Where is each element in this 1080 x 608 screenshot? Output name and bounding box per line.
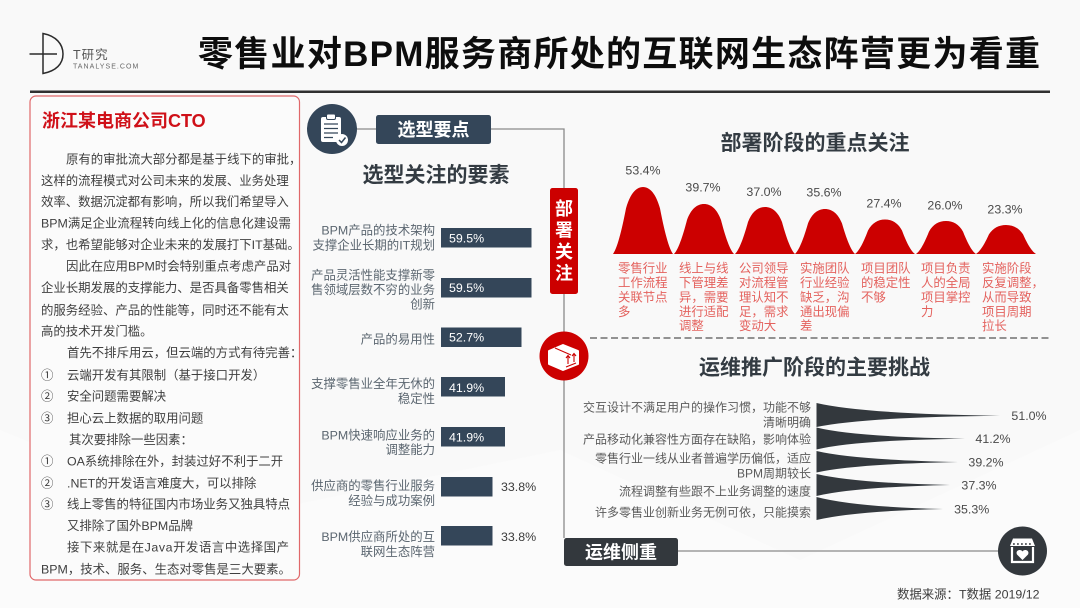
title: 零售业对BPM服务商所处的互联网生态阵营更为看重 xyxy=(198,35,1040,74)
column 7: 23.3% xyxy=(987,202,1023,216)
spike 2: 41.2% xyxy=(975,432,1011,446)
spike 1: 清晰明确 xyxy=(763,416,811,430)
bar 3: 产品的易用性 xyxy=(361,332,435,346)
bar 5: BPM快速响应业务的 xyxy=(321,428,435,442)
column 1: 关联节点 xyxy=(618,290,668,304)
logo: T研究 xyxy=(73,47,109,62)
quote text: 接下来就是在Java开发语言中选择国产 xyxy=(67,540,289,554)
quote text: ① xyxy=(41,452,53,470)
column 7: 实施阶段 xyxy=(982,260,1032,276)
bar 7: BPM供应商所处的互 xyxy=(321,529,435,544)
column 5: 27.4% xyxy=(866,196,902,210)
spike 4 xyxy=(619,474,997,498)
quote text: 因此在应用BPM时会特别重点考虑产品对 xyxy=(66,258,291,274)
bar 2: 59.5% xyxy=(449,281,484,295)
column 4: 实施团队 xyxy=(800,260,850,276)
bar 7: 联网生态阵营 xyxy=(361,545,435,559)
panel heading: 浙江某电商公司CTO xyxy=(42,111,206,131)
quote text: 线上零售的特征国内市场业务又独具特点 xyxy=(67,496,290,512)
column 4: 通出现偏 xyxy=(800,304,850,319)
column 7: 项目周期 xyxy=(982,305,1032,319)
section tag: 选型要点 xyxy=(376,115,491,144)
column 4: 行业经验 xyxy=(800,275,850,290)
quote text: ② xyxy=(41,386,53,404)
quote text: 企业长期发展的支撑能力、是否具备零售相关 xyxy=(41,280,289,295)
bar 1: 59.5% xyxy=(449,232,484,246)
bar 6: 供应商的零售行业服务 xyxy=(311,478,435,493)
spike chart: operations challenges xyxy=(583,400,1047,520)
quote text: 其次要排除一些因素： xyxy=(69,432,193,447)
column 6: 26.0% xyxy=(927,198,963,212)
bar 4: 稳定性 xyxy=(398,391,435,406)
bar 1: 支撑企业长期的IT规划 xyxy=(312,238,435,252)
bar 6 xyxy=(311,477,536,508)
bar 2: 产品灵活性能支撑新零 xyxy=(311,268,436,282)
quote text: ③ xyxy=(41,494,53,512)
column 2: 下管理差 xyxy=(679,275,729,290)
section tag: 部署关注: 部 xyxy=(555,198,573,219)
quote text: 原有的审批流大部分都是基于线下的审批， xyxy=(66,152,301,166)
spike 2 xyxy=(583,428,1011,450)
bar chart: selection factors xyxy=(311,222,536,559)
bar 3 xyxy=(361,328,522,347)
spike 3: 零售行业一线从业者普遍学历偏低，适应 xyxy=(595,450,811,466)
column 3: 37.0% xyxy=(746,185,782,199)
column 5 xyxy=(855,196,915,304)
icon: parcel box xyxy=(540,332,588,380)
column 3: 理认知不 xyxy=(739,290,789,304)
heading: 选型关注的要素: 选型关注的要素 xyxy=(362,164,510,187)
column 6: 力 xyxy=(921,305,933,319)
connector line xyxy=(357,129,1000,551)
column 2: 进行适配 xyxy=(679,305,729,319)
column 1: 零售行业 xyxy=(618,260,668,276)
column 2: 39.7% xyxy=(685,180,721,194)
bar 1: BPM产品的技术架构 xyxy=(321,222,435,238)
column 3 xyxy=(735,185,795,333)
bar 3: 52.7% xyxy=(449,330,484,344)
quote text: ③ xyxy=(41,408,53,426)
bar 2: 售领域层数不穷的业务 xyxy=(311,282,435,297)
column 5: 项目团队 xyxy=(861,260,911,276)
logo xyxy=(30,34,139,74)
section tag: 部署关注: 关 xyxy=(555,242,573,262)
column 3: 公司领导 xyxy=(739,262,789,276)
column 1: 工作流程 xyxy=(618,275,668,290)
quote text: ② xyxy=(41,474,53,492)
data source: 数据来源：T数据 2019/12 xyxy=(897,586,1040,602)
quote text: 这样的流程模式对公司未来的发展、业务处理 xyxy=(41,173,289,188)
section tag: 运维侧重 xyxy=(564,538,678,566)
bar 7 xyxy=(321,526,536,559)
spike 4: 37.3% xyxy=(961,478,997,492)
quote text: 首先不排斥用云，但云端的方式有待完善： xyxy=(67,345,302,360)
bar 4: 41.9% xyxy=(449,381,484,395)
panel: CTO quote xyxy=(30,96,302,580)
quote text: 效率、数据沉淀都有影响，所以我们希望导入 xyxy=(41,194,289,209)
bar 2 xyxy=(311,268,532,312)
column 7: 拉长 xyxy=(982,318,1007,333)
column 3: 足，需求 xyxy=(739,305,789,319)
column 2 xyxy=(674,180,734,333)
section tag: 选型要点: 选型要点 xyxy=(398,120,470,140)
column 7: 反复调整， xyxy=(982,275,1044,290)
heading: 部署阶段的重点关注: 部署阶段的重点关注 xyxy=(720,131,910,155)
quote text: 安全问题需要解决 xyxy=(67,388,166,404)
quote text: ① xyxy=(41,366,53,384)
column 1: 多 xyxy=(618,305,630,319)
column 6: 项目掌控 xyxy=(921,290,971,304)
bar 5 xyxy=(321,427,505,457)
bell chart: deployment focus xyxy=(613,164,1044,333)
bar 5: 调整能力 xyxy=(385,442,435,457)
quote text xyxy=(41,152,302,576)
quote text: 的服务经验、产品的性能等，同时还不能有太 xyxy=(41,302,289,318)
quote text: 求，也希望能够对企业未来的发展打下IT基础。 xyxy=(41,237,300,252)
bar 2: 创新 xyxy=(410,296,435,312)
column 7 xyxy=(976,202,1044,333)
logo: TANALYSE.COM xyxy=(73,64,139,70)
column 6: 项目负责 xyxy=(921,262,971,276)
heading: 运维推广阶段的主要挑战: 运维推广阶段的主要挑战 xyxy=(699,356,930,380)
quote text: BPM，技术、服务、生态对零售是三大要素。 xyxy=(41,562,291,576)
bar 1 xyxy=(312,222,532,252)
column 1: 53.4% xyxy=(625,164,661,178)
bar 4 xyxy=(311,376,505,406)
spike 1 xyxy=(583,400,1047,430)
quote text: 云端开发有其限制（基于接口开发） xyxy=(67,368,265,382)
column 4: 35.6% xyxy=(806,186,842,200)
quote text: 担心云上数据的取用问题 xyxy=(67,410,203,426)
section tag: 部署关注: 署 xyxy=(555,220,573,240)
column 3: 变动大 xyxy=(739,318,776,333)
bar 6: 经验与成功案例 xyxy=(348,493,435,508)
section tag: 部署关注: 注 xyxy=(555,264,573,284)
spike 4: 流程调整有些跟不上业务调整的速度 xyxy=(619,484,811,498)
spike 3: BPM周期较长 xyxy=(737,466,811,480)
column 2: 调整 xyxy=(679,318,704,333)
column 1 xyxy=(613,164,673,319)
quote text: 高的技术开发门槛。 xyxy=(41,324,153,338)
column 6: 人的全局 xyxy=(921,275,971,290)
bar 4: 支撑零售业全年无休的 xyxy=(311,376,435,391)
spike 1: 交互设计不满足用户的操作习惯，功能不够 xyxy=(583,400,811,414)
quote text: BPM满足企业流程转向线上化的信息化建设需 xyxy=(41,216,291,230)
spike 2: 产品移动化兼容性方面存在缺陷，影响体验 xyxy=(583,432,811,446)
spike 5: 许多零售业创新业务无例可依，只能摸索 xyxy=(595,504,811,520)
column 2: 线上与线 xyxy=(679,262,729,276)
bar 7: 33.8% xyxy=(501,530,536,544)
quote text: OA系统排除在外，封装过好不利于二开 xyxy=(67,454,283,468)
spike 3: 39.2% xyxy=(968,456,1004,470)
icon: store xyxy=(998,526,1047,576)
column 7: 从而导致 xyxy=(982,290,1032,304)
bar 6: 33.8% xyxy=(501,480,536,494)
spike 3 xyxy=(595,450,1004,480)
spike 5 xyxy=(595,497,989,520)
column 5: 不够 xyxy=(861,290,886,304)
column 3: 对流程管 xyxy=(739,275,789,290)
section tag: 运维侧重: 运维侧重 xyxy=(585,542,657,562)
bar 5: 41.9% xyxy=(449,430,484,444)
icon: clipboard xyxy=(307,104,357,154)
quote text: 又排除了国外BPM品牌 xyxy=(67,518,193,533)
column 5: 的稳定性 xyxy=(861,275,911,290)
column 6 xyxy=(916,198,976,319)
section tag: 部署关注 xyxy=(550,188,578,294)
column 2: 异，需要 xyxy=(679,290,729,304)
quote text: .NET的开发语言难度大，可以排除 xyxy=(67,476,257,490)
spike 5: 35.3% xyxy=(954,502,989,516)
column 4: 差 xyxy=(800,319,812,333)
spike 1: 51.0% xyxy=(1011,409,1047,423)
column 4 xyxy=(795,186,855,333)
column 4: 缺乏，沟 xyxy=(800,290,850,304)
